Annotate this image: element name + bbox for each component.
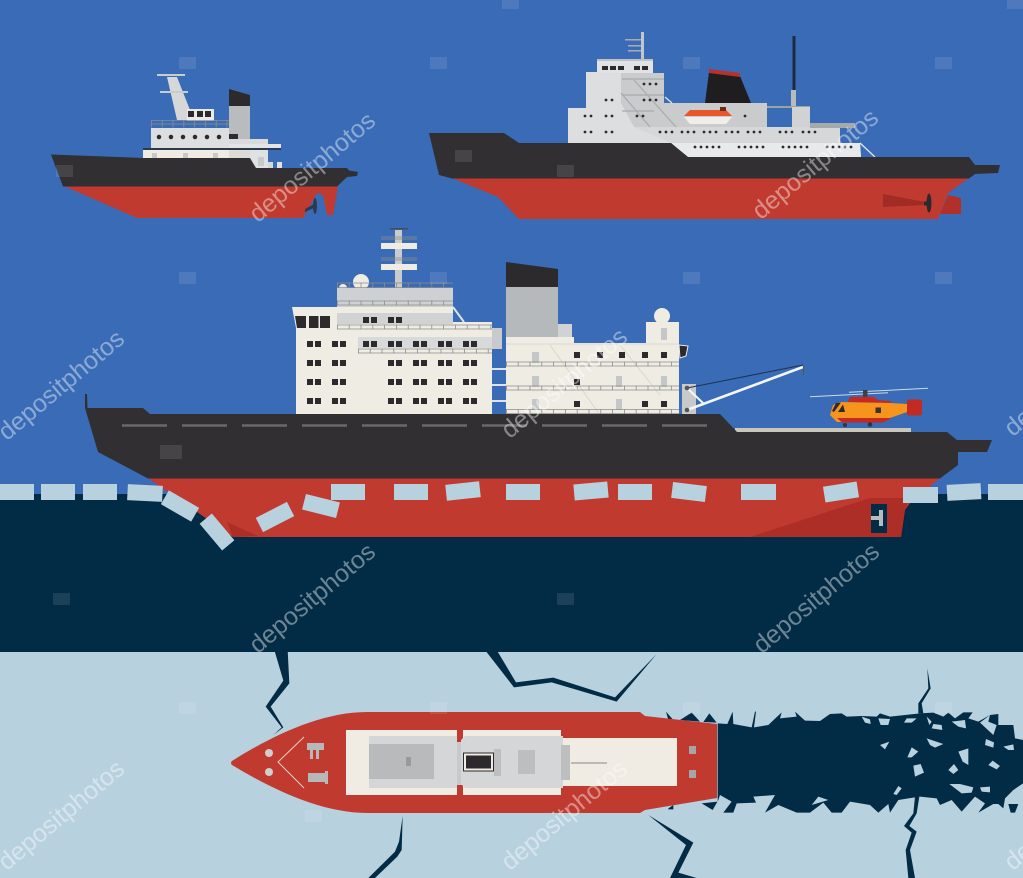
watermark text: depositphotos [748, 537, 885, 659]
large ship forward block [292, 283, 506, 415]
medium ship black hull [429, 133, 1000, 178]
large ship black hull [85, 394, 992, 478]
ship: large nuclear icebreaker [85, 228, 992, 537]
helideck [735, 428, 911, 433]
medium ship masts [625, 32, 796, 108]
tug black hull [51, 154, 358, 186]
large ship crane [682, 365, 804, 414]
medium ship rudder [940, 195, 961, 214]
medium ship superstructure [568, 59, 875, 157]
large ship red hull [148, 478, 940, 537]
tug superstructure [143, 120, 282, 168]
top view forward structure [369, 736, 457, 788]
tug propeller [305, 198, 317, 214]
medium ship lifeboat [684, 107, 732, 124]
large ship hull shading [227, 498, 910, 537]
large ship mast [381, 228, 417, 288]
background: dark sea [0, 494, 1023, 652]
large ship deck dashes [122, 424, 707, 427]
background: sky [0, 0, 1023, 495]
large ship radar domes [339, 274, 369, 292]
large ship aft block [506, 308, 688, 415]
cracks in the ice, left of ship [266, 650, 697, 878]
helicopter [810, 388, 928, 427]
ship: top view [231, 712, 717, 813]
watermark text: depositphotos [496, 754, 633, 876]
watermark text: depositphotos [747, 103, 884, 225]
tug mast [157, 74, 190, 120]
tug red hull [64, 186, 338, 218]
top view aft structure [457, 736, 607, 788]
large ship funnel [506, 262, 572, 337]
broken ice channel behind ship [666, 668, 1023, 878]
ship: medium icebreaker [429, 32, 1000, 219]
top view stern squares [689, 746, 696, 778]
top view red hull [231, 712, 717, 813]
watermark text: depositphotos [244, 106, 381, 228]
background: ice field [0, 652, 1023, 878]
large ship propeller [871, 504, 887, 533]
medium ship red hull [452, 178, 969, 219]
top view bow equipment [265, 737, 328, 788]
watermark text: depositphotos [496, 322, 633, 444]
crack below channel [904, 797, 919, 878]
watermark text: depositphotos [244, 537, 381, 659]
ice blocks at waterline [0, 481, 1023, 551]
ship: small tugboat [51, 74, 358, 218]
medium ship propeller shaft [883, 194, 932, 212]
medium ship funnel [705, 69, 751, 103]
tug funnel [229, 89, 250, 140]
crack above channel [918, 668, 931, 713]
top view deck [346, 730, 677, 795]
ice fragments in channel [812, 715, 1014, 805]
tug wheelhouse [187, 109, 214, 121]
